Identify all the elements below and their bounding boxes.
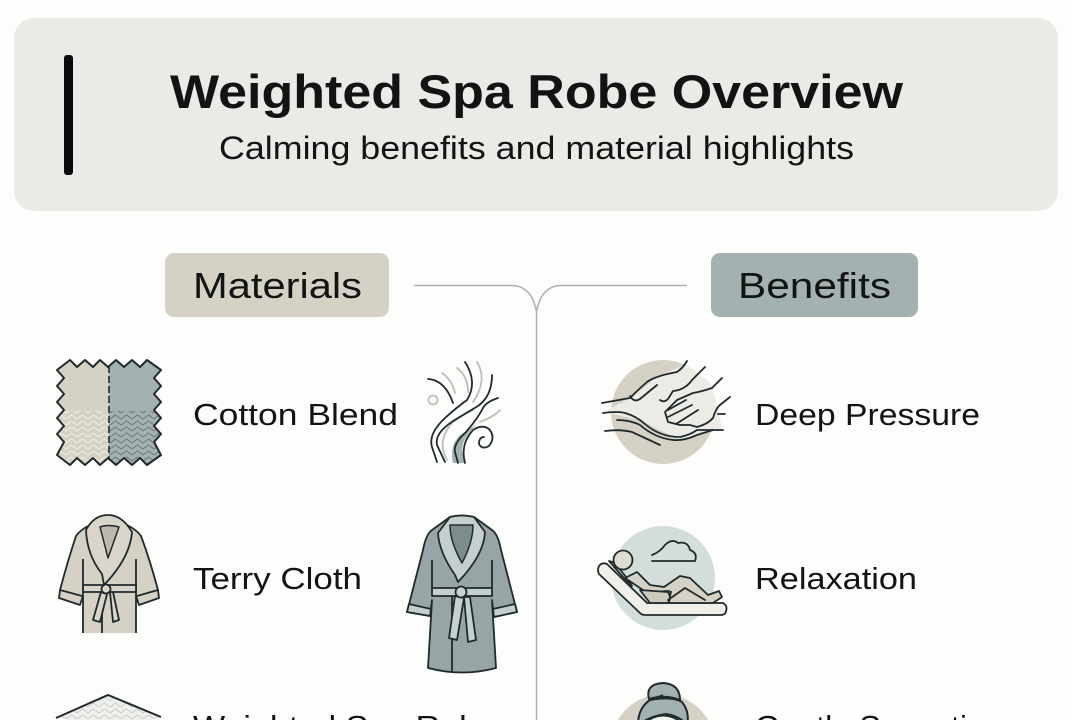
heading: benefits bbox=[711, 253, 918, 317]
icon: fabric swatch bbox=[55, 358, 163, 468]
connector lines bbox=[414, 286, 687, 720]
heading: benefits: Benefits bbox=[738, 265, 891, 306]
label: terry cloth: Terry Cloth bbox=[193, 561, 362, 596]
icon: fibers bbox=[428, 362, 500, 463]
icon: weighted robe diamond bbox=[56, 695, 161, 720]
icon: deep pressure hands bbox=[602, 360, 730, 464]
icon: gray robe bbox=[407, 516, 517, 672]
icon: towel wrapped head bbox=[611, 683, 715, 720]
accent bar bbox=[64, 55, 73, 175]
label: relaxation: Relaxation bbox=[755, 561, 917, 596]
title: Weighted Spa Robe Overview bbox=[170, 65, 903, 118]
label: deep pressure: Deep Pressure bbox=[755, 397, 980, 432]
heading: materials bbox=[165, 253, 389, 317]
icon: beige robe bbox=[59, 515, 159, 633]
heading: materials: Materials bbox=[193, 265, 362, 306]
subtitle: Calming benefits and material highlights bbox=[219, 130, 854, 166]
icon: relaxation bbox=[598, 526, 727, 630]
label: cotton blend: Cotton Blend bbox=[193, 397, 398, 432]
panel: header bbox=[14, 18, 1058, 211]
